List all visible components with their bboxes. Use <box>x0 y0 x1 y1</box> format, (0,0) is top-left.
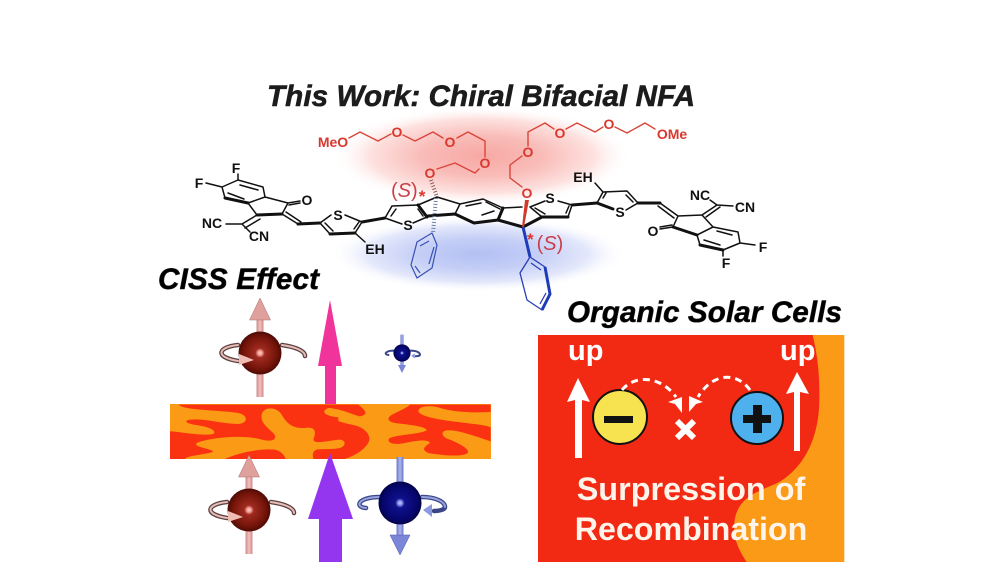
central core <box>418 197 542 227</box>
panel background <box>538 335 844 562</box>
left OMe chain: MeO <box>318 134 348 150</box>
arrow: left up <box>567 378 590 458</box>
heading: CISS Effect: CISS Effect <box>158 263 320 296</box>
right end group: NC <box>690 187 710 203</box>
left thiophene units: EH <box>365 241 385 257</box>
right thiophene units: EH <box>573 169 593 185</box>
left end group: CN <box>249 228 269 244</box>
right OMe chain: OMe <box>657 126 687 142</box>
molecule: chiral bifacial NFA <box>195 106 768 310</box>
dashed path: electron <box>622 380 682 413</box>
blue glow: phenyl face <box>330 216 626 292</box>
right end group <box>638 187 768 271</box>
left OMe chain: O <box>392 124 403 140</box>
panel: CISS diagram <box>170 298 491 562</box>
left OMe chain: O <box>425 165 436 181</box>
label: right up: up <box>780 335 815 367</box>
arrow: right up <box>786 372 809 451</box>
label: left up: up <box>568 335 603 367</box>
right OMe chain: O <box>522 185 533 201</box>
right OMe chain <box>510 116 687 201</box>
right thiophene units: S <box>545 190 555 206</box>
left end group: F <box>195 175 204 191</box>
text: Surpression of Recombination: Surpression of <box>577 471 805 507</box>
right end group: F <box>759 239 768 255</box>
panel: organic solar cells <box>538 335 844 562</box>
left OMe chain: O <box>480 155 491 171</box>
stereo label: left (S)*: (S) <box>391 180 418 202</box>
stereo label: right *(S): * <box>527 230 534 249</box>
title: This Work: Chiral Bifacial NFA <box>267 80 695 113</box>
left end group <box>195 160 320 244</box>
right OMe chain: O <box>555 125 566 141</box>
right thiophene units: S <box>615 204 625 220</box>
left OMe chain <box>318 124 491 181</box>
arrow: pink transmitted current <box>318 300 342 404</box>
spin: bottom red sphere <box>210 455 294 554</box>
right end group: CN <box>735 199 755 215</box>
red stereo wedges <box>431 180 529 227</box>
right end group: O <box>648 223 659 239</box>
recombination cross <box>677 421 694 438</box>
left thiophene units <box>320 205 427 257</box>
dashed path: hole <box>689 377 750 412</box>
left thiophene units: S <box>333 207 343 223</box>
stereo label: right *(S): S) <box>543 233 563 255</box>
blue phenyl rings <box>411 198 550 310</box>
left end group: F <box>232 160 241 176</box>
text: Surpression of Recombination <box>575 471 807 547</box>
spin: small blue sphere <box>386 335 420 373</box>
stereo label: left (S)*: * <box>419 187 426 206</box>
right thiophene units <box>530 169 638 220</box>
spin: top red sphere <box>221 298 305 397</box>
filter film slab <box>170 404 491 459</box>
orange domain <box>734 335 844 562</box>
electron: minus <box>593 390 647 444</box>
left end group: O <box>302 192 313 208</box>
right OMe chain: O <box>604 116 615 132</box>
right end group: F <box>722 255 731 271</box>
left end group: NC <box>202 215 222 231</box>
red glow: hydrophilic face <box>332 106 632 206</box>
text: Surpression of Recombination: Recombination <box>575 511 807 547</box>
left thiophene units: S <box>403 217 413 233</box>
arrow: purple incident current <box>308 453 353 562</box>
right OMe chain: O <box>523 144 534 160</box>
stereo label: right *(S): ( <box>537 233 544 255</box>
left OMe chain: O <box>445 134 456 150</box>
hole: plus <box>731 392 783 444</box>
heading: Organic Solar Cells: Organic Solar Cells <box>567 296 842 329</box>
spin: big blue sphere <box>359 457 445 555</box>
